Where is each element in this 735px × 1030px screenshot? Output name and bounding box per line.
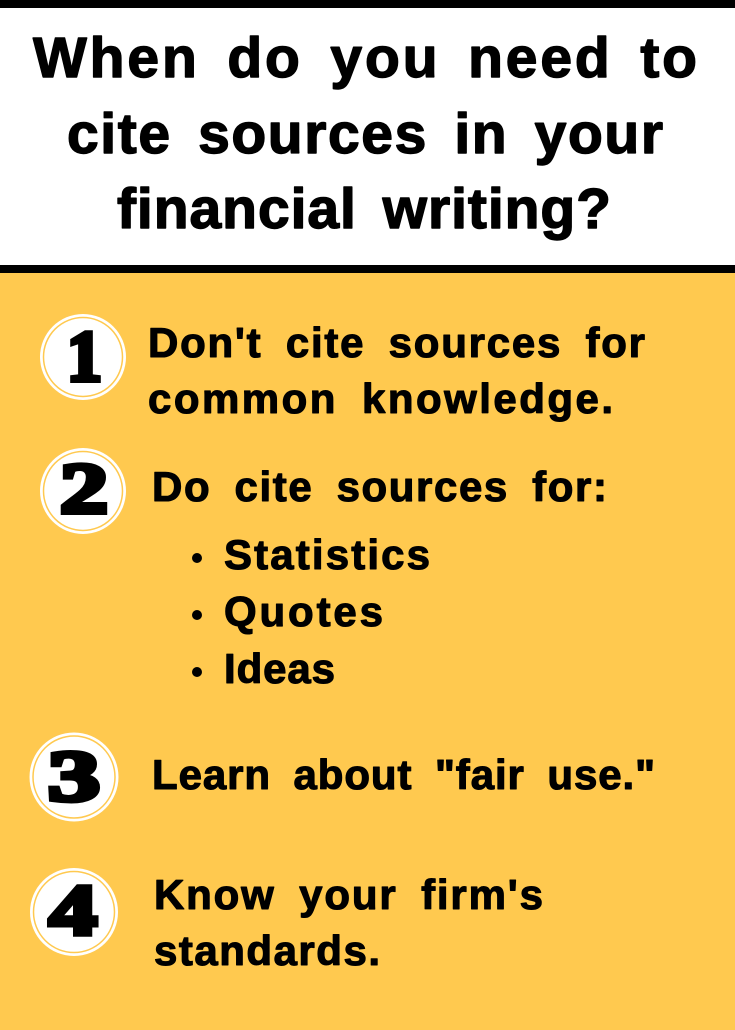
text: item 1 bbox=[148, 319, 645, 422]
text: item 4: standards. bbox=[154, 927, 380, 974]
icon: number 1 badge bbox=[40, 314, 126, 400]
text: item 3: Learn about "fair use." bbox=[152, 751, 655, 798]
text: item 1: Don't cite sources for bbox=[148, 319, 645, 366]
icon: number 4 badge bbox=[30, 868, 118, 956]
icon: number 1 badge: 1 bbox=[67, 316, 102, 396]
list: citation types: Ideas bbox=[224, 645, 335, 692]
icon: number 3 badge: 3 bbox=[48, 736, 100, 816]
title bbox=[33, 26, 697, 241]
text: item 4: Know your firm's bbox=[154, 871, 543, 918]
text: item 1: common knowledge. bbox=[148, 375, 613, 422]
icon: number 2 badge: 2 bbox=[60, 448, 108, 528]
title: financial writing? bbox=[117, 177, 611, 241]
icon: number 3 badge bbox=[30, 732, 118, 822]
icon: number 2 badge bbox=[40, 448, 126, 534]
title: When do you need to bbox=[33, 26, 697, 90]
title: cite sources in your bbox=[67, 102, 663, 166]
list: citation types: Quotes bbox=[224, 588, 383, 635]
list: citation types bbox=[192, 531, 430, 692]
panel: yellow background bbox=[0, 273, 735, 1030]
list: citation types: Statistics bbox=[224, 531, 430, 578]
text: item 2: Do cite sources for: bbox=[152, 463, 607, 510]
icon: number 4 badge: 4 bbox=[49, 870, 97, 950]
text: item 4 bbox=[154, 871, 543, 974]
panel: title header bbox=[0, 0, 735, 273]
